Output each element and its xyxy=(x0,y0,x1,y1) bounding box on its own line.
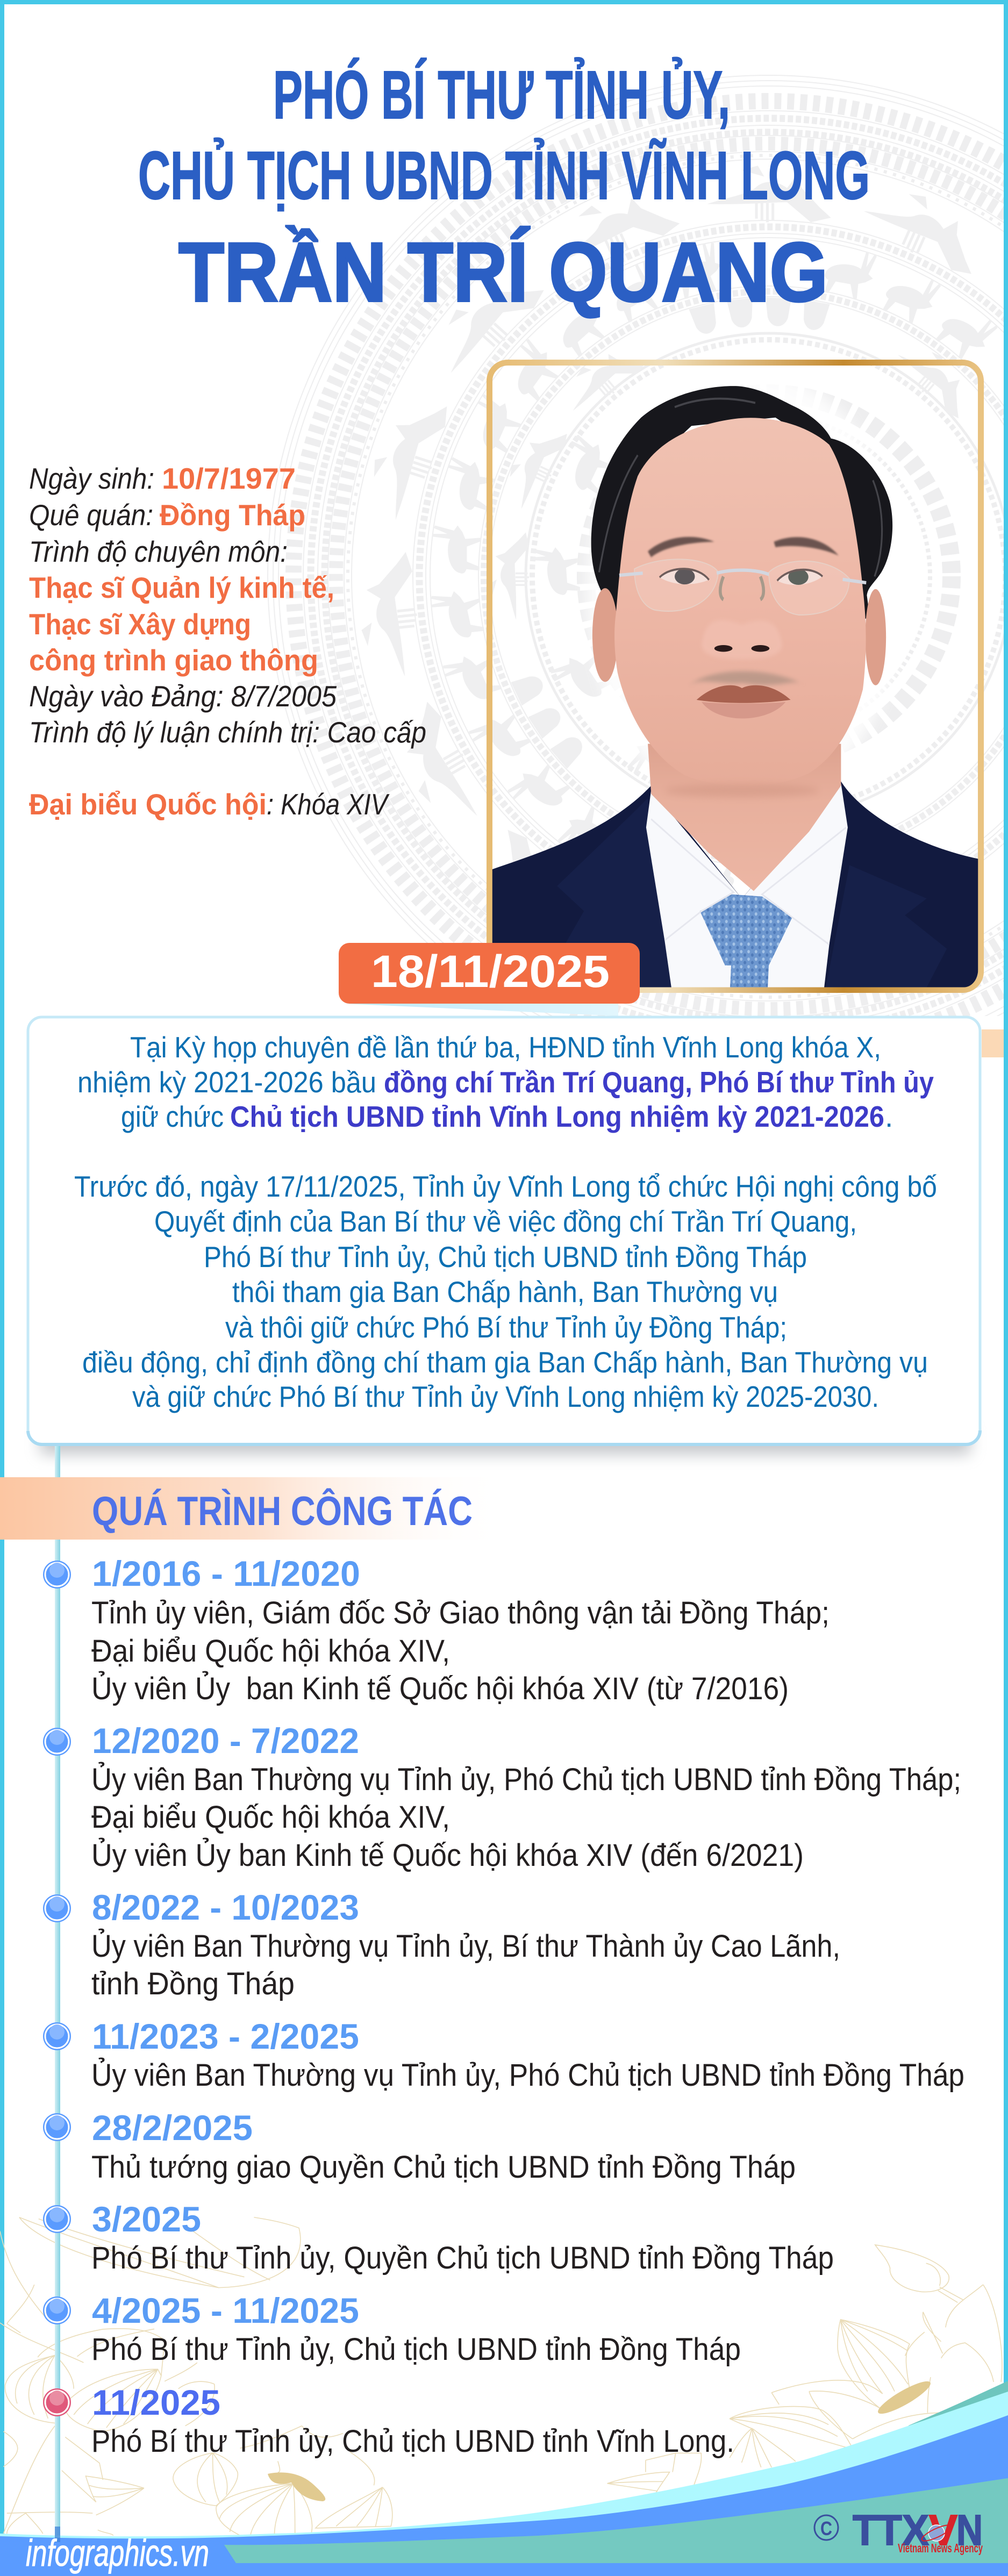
timeline line xyxy=(55,1446,60,2542)
TTXVN logo: N xyxy=(956,2506,983,2554)
timeline entry 5: 28/2/2025 xyxy=(92,2108,253,2148)
copyright mark: C xyxy=(820,2517,832,2539)
TTXVN logo xyxy=(814,2506,983,2555)
timeline entry 1: 1/2016 - 11/2020 xyxy=(92,1554,360,1593)
biography text: Đồng Tháp xyxy=(160,498,305,532)
date badge xyxy=(339,943,640,1004)
paragraph one xyxy=(77,1031,934,1133)
timeline entry 7 xyxy=(43,2291,741,2367)
timeline entry 6: 3/2025 xyxy=(92,2199,201,2239)
timeline entry 2: 12/2020 - 7/2022 xyxy=(92,1721,359,1761)
paragraph two: Trước đó, ngày 17/11/2025, Tỉnh ủy Vĩnh Long tổ chức Hội nghị công bố xyxy=(74,1170,937,1203)
timeline line overlay on wave xyxy=(55,2527,60,2542)
paragraph two: Quyết định của Ban Bí thư về việc đồng chí Trần Trí Quang, xyxy=(154,1205,857,1238)
bullet xyxy=(43,1728,71,1756)
orange strip beside card xyxy=(982,1029,1004,1057)
paragraph one: nhiệm kỳ 2021-2026 bầu xyxy=(77,1065,376,1099)
timeline entry 7: 4/2025 - 11/2025 xyxy=(92,2291,359,2330)
biography text: Ngày vào Đảng: 8/7/2005 xyxy=(29,679,337,713)
title xyxy=(138,57,870,319)
timeline entry 3: Ủy viên Ban Thường vụ Tỉnh ủy, Bí thư Thành ủy Cao Lãnh, xyxy=(91,1929,840,1964)
title: PHÓ BÍ THƯ TỈNH ỦY, xyxy=(273,57,730,133)
timeline entry 3: 8/2022 - 10/2023 xyxy=(92,1887,359,1927)
bullet xyxy=(43,2388,71,2416)
portrait xyxy=(492,367,978,987)
timeline entry 2 xyxy=(43,1721,961,1873)
paragraph two: và giữ chức Phó Bí thư Tỉnh ủy Vĩnh Long nhiệm kỳ 2025-2030. xyxy=(132,1380,879,1413)
timeline entry 1: Ủy viên Ủy ban Kinh tế Quốc hội khóa XIV (từ 7/2016) xyxy=(91,1671,789,1706)
portrait photo with gold frame xyxy=(489,362,981,990)
biography text: Quê quán: xyxy=(29,498,153,532)
paragraph two xyxy=(74,1170,937,1413)
timeline entry 6: Phó Bí thư Tỉnh ủy, Quyền Chủ tịch UBND tỉnh Đồng Tháp xyxy=(91,2241,834,2276)
timeline entry 2: Ủy viên Ủy ban Kinh tế Quốc hội khóa XIV (đến 6/2021) xyxy=(91,1838,804,1873)
TTXVN logo: V xyxy=(929,2506,957,2554)
biography text: Trình độ chuyên môn: xyxy=(29,535,288,568)
gold lotus seed shapes xyxy=(268,2377,934,2501)
biography text: Thạc sĩ Quản lý kinh tế, xyxy=(29,571,334,604)
footer site name: infographics.vn xyxy=(26,2532,209,2574)
heading: work history xyxy=(0,1477,508,1540)
bullet xyxy=(43,2022,71,2050)
timeline entry 2: Đại biểu Quốc hội khóa XIV, xyxy=(91,1800,450,1835)
globe xyxy=(920,2522,953,2544)
timeline entry 3: tỉnh Đồng Tháp xyxy=(91,1966,295,2001)
timeline entry 8: Phó Bí thư Tỉnh ủy, Chủ tịch UBND tỉnh Vĩnh Long. xyxy=(91,2424,734,2459)
timeline entry 7: Phó Bí thư Tỉnh ủy, Chủ tịch UBND tỉnh Đồng Tháp xyxy=(91,2332,741,2367)
timeline entry 5 xyxy=(43,2108,796,2185)
timeline entry 1: Tỉnh ủy viên, Giám đốc Sở Giao thông vận tải Đồng Tháp; xyxy=(91,1595,830,1630)
bullet xyxy=(43,2296,71,2324)
timeline entry 4: 11/2023 - 2/2025 xyxy=(92,2016,359,2056)
timeline entry 5: Thủ tướng giao Quyền Chủ tịch UBND tỉnh Đồng Tháp xyxy=(91,2150,796,2185)
paragraph two: thôi tham gia Ban Chấp hành, Ban Thường vụ xyxy=(232,1275,778,1308)
heading: work history: QUÁ TRÌNH CÔNG TÁC xyxy=(92,1489,473,1534)
bullet xyxy=(43,1561,71,1588)
background bronze drum pattern xyxy=(268,75,1008,1077)
paragraph two: Phó Bí thư Tỉnh ủy, Chủ tịch UBND tỉnh Đồng Tháp xyxy=(204,1240,807,1273)
biography text xyxy=(29,462,426,821)
biography text: : Khóa XIV xyxy=(267,788,390,821)
timeline entry 1: Đại biểu Quốc hội khóa XIV, xyxy=(91,1634,450,1669)
paragraph one: giữ chức xyxy=(121,1100,224,1133)
timeline entry 6 xyxy=(43,2199,834,2276)
timeline entry 4 xyxy=(43,2016,964,2093)
biography text: 10/7/1977 xyxy=(162,462,296,495)
badge shadow wedge xyxy=(344,1004,618,1016)
title: TRẦN TRÍ QUANG xyxy=(178,226,828,319)
timeline entry 8: 11/2025 xyxy=(92,2382,220,2422)
timeline entry 8 xyxy=(43,2382,734,2459)
summary card xyxy=(28,1017,980,1444)
TTXVN logo: TTX xyxy=(853,2506,929,2554)
card shadow xyxy=(40,1427,970,1454)
copyright mark xyxy=(814,2515,838,2540)
biography text: Ngày sinh: xyxy=(29,462,154,495)
paragraph one: đồng chí Trần Trí Quang, Phó Bí thư Tỉnh ủy xyxy=(384,1065,934,1099)
paragraph two: điều động, chỉ định đồng chí tham gia Ban Chấp hành, Ban Thường vụ xyxy=(82,1346,928,1379)
biography text: Thạc sĩ Xây dựng xyxy=(29,607,251,641)
paragraph one: Tại Kỳ họp chuyên đề lần thứ ba, HĐND tỉnh Vĩnh Long khóa X, xyxy=(130,1031,881,1064)
lotus line art xyxy=(0,2217,1002,2536)
timeline entry 1 xyxy=(43,1554,830,1706)
bullet xyxy=(43,2205,71,2233)
bottom waves xyxy=(0,2381,1008,2576)
paragraph two: và thôi giữ chức Phó Bí thư Tỉnh ủy Đồng Tháp; xyxy=(225,1311,787,1344)
paragraph one: . xyxy=(885,1100,893,1133)
timeline entry 3 xyxy=(43,1887,840,2001)
paragraph one: Chủ tịch UBND tỉnh Vĩnh Long nhiệm kỳ 2021-2026 xyxy=(230,1100,884,1133)
biography text: Trình độ lý luận chính trị: Cao cấp xyxy=(29,715,426,749)
biography text: công trình giao thông xyxy=(29,643,318,677)
bullet xyxy=(43,2113,71,2141)
bullet xyxy=(43,1894,71,1922)
date badge: 18/11/2025 xyxy=(371,946,610,997)
biography text: Đại biểu Quốc hội xyxy=(29,788,267,821)
